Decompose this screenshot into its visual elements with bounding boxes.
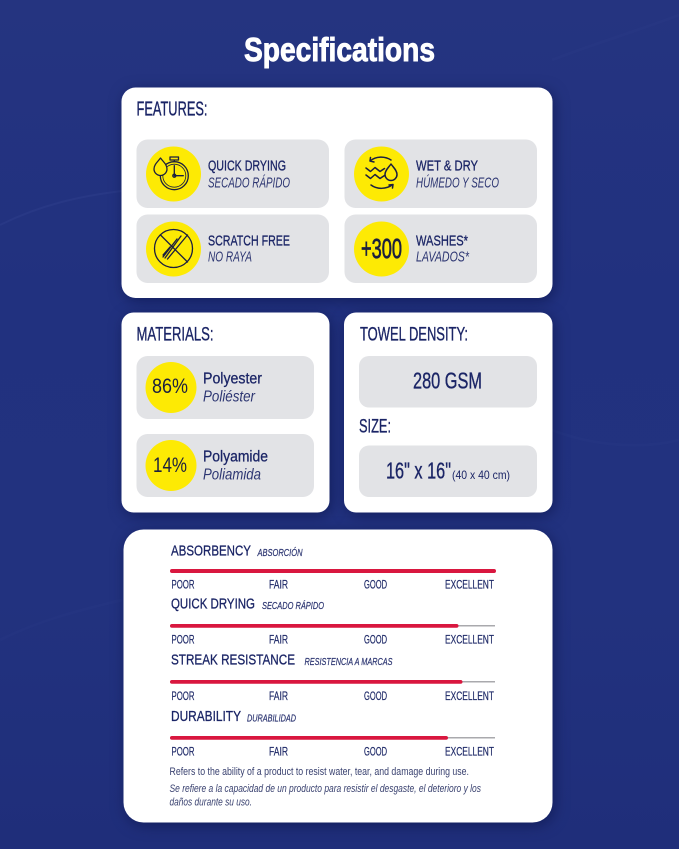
title: Specifications — [244, 31, 435, 68]
rating: durability: FAIR — [269, 747, 288, 759]
rating: quick drying: GOOD — [364, 635, 387, 647]
panel: materials — [122, 312, 330, 512]
feature: scratch free: SCRATCH FREE — [208, 232, 290, 250]
feature: washes: +300 — [361, 233, 402, 264]
heading: features: FEATURES: — [136, 98, 208, 120]
feature: quick drying — [136, 140, 329, 208]
rating: quick drying: QUICK DRYING — [171, 596, 255, 612]
panel: features — [122, 88, 552, 298]
footnote — [170, 766, 481, 808]
rating: quick drying — [170, 596, 495, 647]
feature: wet and dry — [344, 140, 537, 208]
rating: absorbency: GOOD — [364, 580, 387, 592]
feature: scratch free: NO RAYA — [208, 248, 252, 266]
rating: streak resistance — [170, 652, 495, 703]
footnote: daños durante su uso. — [170, 796, 252, 808]
rating: absorbency: ABSORBENCY — [171, 542, 251, 560]
feature: washes — [344, 214, 537, 283]
rating: quick drying: FAIR — [269, 635, 288, 647]
rating: absorbency: ABSORCIÓN — [257, 546, 303, 559]
density value — [359, 356, 537, 408]
rating: durability — [170, 708, 495, 759]
rating: durability: POOR — [172, 747, 194, 759]
panel: performance ratings — [124, 530, 552, 822]
material: polyester — [136, 356, 314, 419]
icon: no scratches — [154, 230, 192, 268]
rating: quick drying: EXCELLENT — [445, 635, 494, 647]
material: polyamide — [136, 434, 314, 497]
rating: quick drying: SECADO RÁPIDO — [262, 599, 324, 612]
rating: streak resistance: EXCELLENT — [445, 691, 494, 703]
icon: stopwatch with droplet — [154, 157, 188, 190]
rating: absorbency: EXCELLENT — [445, 580, 494, 592]
rating: streak resistance: STREAK RESISTANCE — [171, 652, 295, 668]
size value: 16" x 16" — [386, 458, 451, 484]
rating: durability: GOOD — [364, 747, 387, 759]
feature: quick drying: SECADO RÁPIDO — [208, 174, 290, 192]
feature: wet and dry: WET & DRY — [416, 158, 478, 174]
rating: streak resistance: GOOD — [364, 691, 387, 703]
density value: 280 GSM — [413, 368, 482, 394]
rating: quick drying: POOR — [172, 635, 194, 647]
feature: washes: LAVADOS* — [416, 248, 470, 266]
material: polyester: 86% — [152, 375, 188, 398]
material: polyamide: Poliamida — [203, 466, 261, 484]
size value — [359, 446, 537, 497]
panel: density and size — [344, 312, 552, 512]
size value: (40 x 40 cm) — [452, 468, 510, 482]
rating: durability: DURABILIDAD — [247, 714, 296, 724]
footnote: Se refiere a la capacidad de un producto para resistir el desgaste, el deterioro y los — [170, 783, 481, 795]
footnote: Refers to the ability of a product to resist water, tear, and damage during use. — [170, 766, 469, 778]
rating: streak resistance: POOR — [172, 691, 194, 703]
feature: wet and dry: HÚMEDO Y SECO — [416, 174, 499, 192]
material: polyester: Poliéster — [203, 388, 256, 406]
rating: durability: EXCELLENT — [445, 747, 494, 759]
rating: absorbency: POOR — [172, 580, 194, 592]
feature: washes: WASHES* — [416, 232, 468, 250]
rating: durability: DURABILITY — [171, 708, 241, 725]
heading: towel density: TOWEL DENSITY: — [360, 324, 468, 346]
heading: materials: MATERIALS: — [136, 324, 214, 346]
feature: scratch free — [136, 214, 329, 283]
rating: absorbency — [170, 542, 496, 592]
heading: size: SIZE: — [359, 416, 391, 438]
material: polyamide: 14% — [153, 454, 187, 477]
material: polyester: Polyester — [203, 370, 263, 388]
icon: wet and dry cycle — [366, 157, 397, 188]
rating: streak resistance: RESISTENCIA A MARCAS — [304, 657, 393, 668]
rating: absorbency: FAIR — [269, 580, 288, 592]
material: polyamide: Polyamide — [203, 448, 268, 466]
rating: streak resistance: FAIR — [269, 691, 288, 703]
feature: quick drying: QUICK DRYING — [208, 158, 286, 174]
